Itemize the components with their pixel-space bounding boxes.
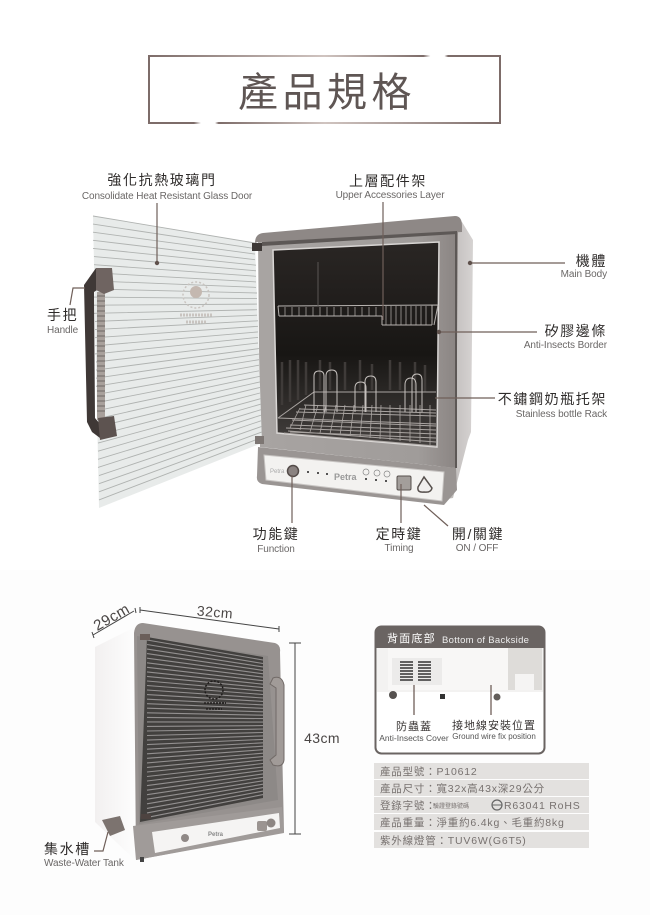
crest — [204, 681, 226, 709]
base panel — [133, 807, 284, 860]
label: stainless bottle rack: 不鏽鋼奶瓶托架 — [498, 391, 607, 407]
label: on off — [424, 505, 504, 554]
label: anti-insects border: 矽膠邊條 — [545, 323, 607, 339]
panel: bottom of backside: Bottom of Backside — [442, 635, 529, 646]
panel brand and indicators: Petra — [270, 469, 285, 475]
spec: uv lamp: 紫外線燈管：TUV6W(G6T5) — [380, 834, 527, 847]
panel heading: 背面底部 — [387, 631, 436, 645]
label: waste water tank — [44, 832, 125, 869]
cabinet top frame — [255, 216, 462, 243]
label: stainless bottle rack — [435, 391, 608, 420]
glass door — [84, 216, 264, 508]
front frame — [134, 623, 284, 860]
label: on off: ON / OFF — [456, 543, 498, 554]
label: upper accessories layer: 上層配件架 — [349, 173, 427, 189]
label: stainless bottle rack: Stainless bottle Rack — [516, 409, 608, 420]
label: main body: 機體 — [576, 253, 607, 269]
panel: bottom of backside — [375, 626, 545, 754]
label: function — [253, 475, 299, 555]
backside photo — [377, 648, 543, 700]
spec: registration: 驗證登錄號碼 — [433, 802, 469, 810]
product: open sterilizer cabinet — [255, 216, 473, 505]
label: on off: 開/關鍵 — [452, 526, 504, 542]
label: upper accessories layer — [336, 173, 445, 320]
pointer: ground wire — [490, 685, 492, 715]
dimension: 29cm: 29cm — [91, 601, 133, 635]
label: anti-insects border: Anti-Insects Border — [524, 340, 608, 351]
spec: size: 產品尺寸：寬32x高43x深29公分 — [380, 782, 545, 795]
label: upper accessories layer: Upper Accessories Layer — [336, 190, 445, 201]
door handle — [84, 268, 100, 438]
on off button — [418, 477, 432, 492]
label: ground wire position: Ground wire fix position — [452, 732, 536, 741]
dimension: 32cm: 32cm — [196, 602, 234, 622]
bottle reflections — [282, 360, 425, 405]
label: waste water tank: Waste-Water Tank — [44, 858, 125, 869]
product: closed sterilizer with dimensions: Petra — [208, 832, 224, 838]
lower stainless bottle rack — [278, 370, 436, 446]
panel brand and indicators: Petra — [334, 472, 358, 482]
label: anti-insects cover: Anti-Insects Cover — [379, 733, 449, 743]
label: main body: Main Body — [561, 269, 607, 280]
foot — [140, 857, 144, 862]
dark door — [140, 637, 263, 822]
function knob — [288, 466, 298, 476]
spec: registration: 登錄字號： — [380, 799, 436, 812]
label: main body — [468, 253, 607, 280]
spec: registration — [380, 799, 581, 812]
spec: model: 產品型號：P10612 — [380, 765, 478, 778]
label: ground wire position: 接地線安裝位置 — [452, 718, 536, 732]
upper accessory rack — [278, 262, 438, 325]
label: timing — [376, 484, 422, 554]
label: anti-insects border — [437, 323, 608, 351]
spec: weight: 產品重量：淨重約6.4kg、毛重約8kg — [380, 816, 565, 829]
label: timing: Timing — [384, 543, 414, 554]
label: anti-insects cover — [379, 719, 449, 743]
base control panel — [257, 447, 457, 505]
label: glass door: 強化抗熱玻璃門 — [107, 172, 217, 188]
door columns — [137, 636, 278, 824]
waste water tank — [102, 816, 125, 836]
white side panel — [95, 627, 135, 860]
timing knob — [397, 476, 411, 490]
label: timing: 定時鍵 — [376, 526, 422, 542]
label: handle — [47, 288, 85, 336]
handle — [270, 677, 284, 766]
title: 產品規格 — [238, 71, 416, 115]
dimension: 43cm: 43cm — [304, 730, 340, 746]
spec: registration: R63041 RoHS — [504, 800, 581, 812]
label: glass door: Consolidate Heat Resistant Glass Door — [82, 191, 253, 202]
spec table — [374, 763, 589, 848]
dimension: 43cm — [289, 643, 340, 834]
label: anti-insects cover: 防蟲蓋 — [396, 719, 432, 733]
pointer: anti-insects cover — [413, 685, 415, 715]
label: handle: Handle — [47, 325, 79, 336]
interior — [273, 242, 439, 447]
label: function: 功能鍵 — [253, 526, 299, 542]
cabinet side panel — [440, 218, 473, 500]
label: function: Function — [257, 544, 295, 555]
label: ground wire position — [452, 718, 536, 741]
cabinet front frame — [258, 226, 458, 468]
door hinges — [252, 243, 262, 251]
product: closed sterilizer with dimensions — [95, 623, 284, 862]
door crest — [180, 282, 212, 322]
panel brand and indicators — [270, 469, 390, 482]
label: glass door — [82, 172, 253, 265]
dimension: 32cm — [140, 602, 279, 632]
label: handle: 手把 — [47, 307, 78, 323]
label: waste water tank: 集水槽 — [44, 841, 91, 857]
